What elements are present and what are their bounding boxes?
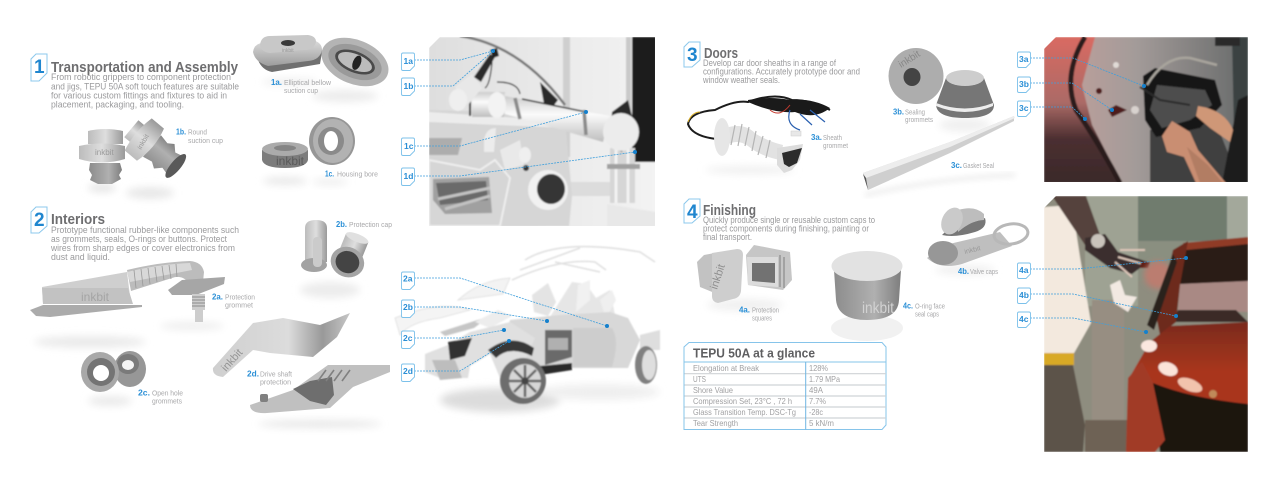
callout 4a: 4a [1019,265,1029,275]
callout 1c [402,110,588,156]
caption 3a: Sheath [823,135,842,142]
callouts: section 1 [402,49,637,186]
caption 4c: 4c. [903,302,913,310]
caption 2a [212,292,255,310]
caption 2d: protection [260,380,291,386]
icon: round suction cups: inkbit [95,148,114,157]
caption 3a: grommet [823,143,848,150]
table rows: Tear Strength [693,418,738,428]
caption 1b: suction cup [188,138,223,145]
caption 4b [958,267,998,276]
text block: transportation description: for various custom fittings and fixtures to aid in [51,90,227,102]
text block: transportation description [51,72,239,110]
icon: o-ring face seal cap [831,251,903,341]
icon: o-ring face seal cap: inkbit [862,300,894,317]
caption 1a [271,78,332,95]
text block: transportation description: placement, packaging, and tooling. [51,100,184,110]
text block: finishing description: Quickly produce single or reusable custom caps to [703,215,875,226]
icon: protection grommet [30,261,225,348]
section number badge 1 [31,54,47,81]
text block: transportation description: From robotic grippers to component protection [51,72,231,83]
caption 3b: 3b. [893,108,904,116]
caption 4c [903,302,945,318]
caption 3b: grommets [905,117,933,124]
caption 2b: Protection cap [349,222,392,229]
table rows: 128% [809,363,828,373]
icon: sealing grommets: inkbit [897,49,923,71]
caption 3a: 3a. [811,133,822,142]
callout 2c [402,328,506,348]
heading: transportation and assembly: Transportation and Assembly [51,59,239,76]
callout 1d: 1d [404,171,413,181]
table rows: -28c [809,407,824,417]
panel: transportation and assembly [31,28,396,199]
icon: drive shaft protection: inkbit [219,347,245,374]
icon: housing bore rings [262,117,355,185]
table heading: TEPU 50A at a glance [693,346,815,360]
photo: car paint booth [1044,196,1248,452]
section number badge 4: 4 [687,202,698,223]
caption 1c: Housing bore [337,172,378,178]
table rows [684,362,886,430]
caption 4a: Protection [752,308,779,314]
caption 2c [138,388,183,406]
heading: interiors: Interiors [51,211,105,228]
section number badge 2 [31,207,47,233]
callout 1a: 1a [404,56,413,66]
icon: round suction cups: inkbit [137,133,151,151]
section number badge 3 [684,42,700,67]
table rows: Compression Set, 23°C , 72 h [693,396,792,406]
section number badge 2: 2 [34,210,45,231]
text block: doors description: Develop car door sheaths in a range of [703,58,836,69]
caption 2a: Protection [225,294,255,302]
callout 1c: 1c [404,141,414,151]
table rows: 5 kN/m [809,418,834,428]
icon: protection caps [300,220,374,298]
photo: robot arm on car door [429,36,656,227]
callout 2c: 2c [403,333,413,343]
section number badge 1: 1 [34,57,45,78]
callout 4b: 4b [1019,290,1029,300]
icon: sealing grommets [888,48,994,132]
table rows: 49A [809,385,823,395]
caption 2b: 2b. [336,220,347,229]
caption 3c [951,161,994,170]
callout 3a: 3a [1019,54,1029,64]
caption 2c: grommets [152,398,182,406]
text block: finishing description [703,215,875,243]
panel: interiors [30,207,392,428]
text block: doors description [702,58,860,86]
callout 1b: 1b [404,81,413,91]
icon: protection squares: inkbit [708,263,728,291]
heading: doors: Doors [704,45,738,62]
caption 4a [739,306,779,322]
caption 4a: squares [752,316,772,322]
caption 2d: Drive shaft [260,372,292,378]
callouts: section 2 [402,272,609,382]
callout 2d: 2d [403,366,413,376]
icon: protection grommet: inkbit [81,290,110,304]
caption 1b: Round [188,130,207,136]
table rows: Shore Value [693,385,733,395]
caption 4b: 4b. [958,267,969,276]
table rows: 7.7% [809,396,826,406]
text block: interiors description [50,225,239,263]
section number badge 3: 3 [687,45,698,66]
callout 4a [1018,256,1188,278]
caption 2a: grommet [225,302,253,310]
callouts: section 3 [1018,52,1146,121]
photo: exploded car [395,247,660,412]
caption 1c [325,170,378,178]
icon: sheath grommet with wiring [688,96,830,174]
caption 2d: 2d. [247,370,259,378]
callouts: section 4 [1018,256,1188,334]
text block: interiors description: as grommets, seals, O-rings or buttons. Protect [51,234,227,245]
callout 4c: 4c [1019,314,1029,324]
icon: drive shaft protection [213,313,390,428]
caption 4c: O-ring face [915,304,945,310]
table: TEPU 50A at a glance [684,342,886,430]
table rows: 1.79 MPa [809,374,840,384]
caption 4b: Valve caps [970,269,998,276]
table rows: Glass Transition Temp. DSC-Tg [693,407,796,417]
caption 3c: 3c. [951,161,962,170]
caption 2b [336,220,392,229]
callout 2a: 2a [403,274,413,284]
table rows: UTS [693,374,706,384]
callout 4b [1018,288,1178,318]
caption 1b [176,128,223,145]
callout 1b [402,51,493,96]
icon: round suction cups [79,113,193,199]
icon: gasket seal [863,116,1015,195]
icon: valve caps [927,204,1029,275]
caption 1a: 1a. [271,78,282,87]
text block: interiors description: wires from sharp edges or cover electronics from [50,243,235,254]
icon: valve caps: inkbit [964,245,981,256]
text block: finishing description: final transport. [703,232,752,243]
text block: doors description: window weather seals. [702,75,780,86]
heading: finishing: Finishing [703,202,756,219]
caption 2a: 2a. [212,292,223,302]
callout 2b: 2b [403,302,413,312]
caption 4c: seal caps [915,312,939,318]
icon: elliptical bellow suction cups [253,28,396,102]
icon: elliptical bellow suction cups: inkbit [282,48,294,54]
text block: transportation description: and jigs, TEPU 50A soft touch features are suitable [51,82,239,92]
caption 2c: Open hole [152,390,183,398]
caption 3a [811,133,848,150]
caption 3b [893,108,933,124]
callout 1d [402,150,637,186]
callout 2a [402,272,609,328]
caption 4a: 4a. [739,306,750,314]
callout 3b: 3b [1019,79,1029,89]
caption 2c: 2c. [138,388,150,398]
panel: doors [684,42,1015,195]
text block: doors description: configurations. Accurately prototype door and [703,66,860,78]
photo: car door wiring [1044,37,1248,183]
text block: interiors description: Prototype functional rubber-like components such [51,225,239,236]
table rows: Elongation at Break [693,363,760,373]
caption 1b: 1b. [176,128,186,136]
icon: housing bore rings: inkbit [276,154,305,168]
caption 1a: suction cup [284,88,318,95]
icon: open hole grommets [81,351,146,406]
caption 1c: 1c. [325,170,334,178]
callout 4c [1018,312,1148,334]
callout 2b [402,300,549,323]
callout 3c: 3c [1019,103,1029,113]
caption 3b: Sealing [905,110,925,116]
caption 2d [247,370,292,386]
panel: finishing [684,199,1029,341]
caption 3c: Gasket Seal [963,163,994,170]
callout 1a [402,49,495,70]
text block: interiors description: dust and liquid. [51,252,110,263]
caption 1a: Elliptical bellow [284,80,332,87]
icon: protection squares [697,245,792,311]
section number badge 4 [684,199,700,223]
text block: finishing description: protect components during finishing, painting or [703,224,870,234]
callout 2d [402,339,511,382]
